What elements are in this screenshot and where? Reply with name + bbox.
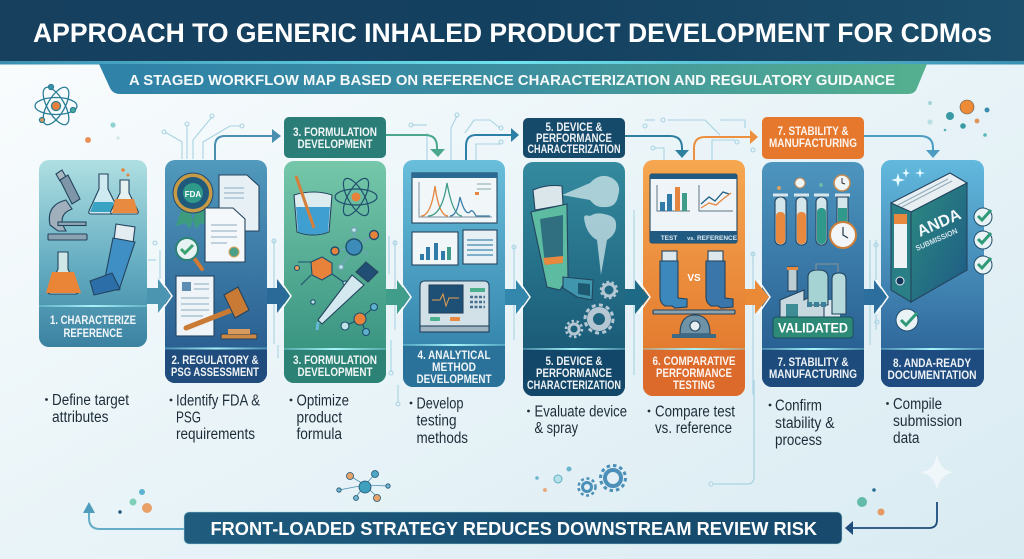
label: 1. CHARACTERIZE <box>50 313 136 327</box>
icon: ANDA binder: ANDA <box>915 206 964 241</box>
arrow: panel 4 to header 5 <box>466 128 519 160</box>
panel: 5 device and performance characterization: PERFORMANCE <box>536 366 612 380</box>
bullet: confirm stability and process: stability & <box>775 415 835 432</box>
icon: analytical instrument <box>420 281 489 332</box>
panel: 5 device and performance characterization <box>523 162 625 396</box>
banner: front-loaded strategy <box>184 512 842 544</box>
icon: bar chart screen <box>412 232 458 265</box>
icon: inhaler cutaway <box>531 186 593 300</box>
panel: 2 regulatory and PSG assessment <box>165 160 267 383</box>
icon: gears <box>566 282 617 337</box>
panel: 6 comparative performance testing <box>643 160 745 396</box>
bullet: optimize product formula: formula <box>296 426 342 443</box>
bullet: optimize product formula: product <box>296 410 343 426</box>
bullet: evaluate device and spray <box>527 404 627 437</box>
label: 8. ANDA-READY <box>893 356 971 370</box>
panel: 3 formulation development: DEVELOPMENT <box>298 365 373 379</box>
header: 3 formulation development <box>284 117 386 158</box>
icon: FDA seal <box>173 173 213 229</box>
icon: lower molecule decoration <box>337 470 390 502</box>
icon: magnifier check <box>176 238 202 269</box>
bullet: evaluate device and spray: Evaluate device <box>534 404 627 420</box>
arrow: header 3 to panel 4 <box>386 135 445 157</box>
panel: 6 comparative performance testing: TESTING <box>673 378 715 392</box>
icon: orange flask <box>111 168 138 214</box>
arrow: 1 to 2 <box>147 279 172 313</box>
bullet: confirm stability and process <box>769 398 835 449</box>
arrow: 7 to 8 <box>864 280 888 314</box>
badge: validated: VALIDATED <box>778 320 848 336</box>
bullet: develop testing methods: methods <box>416 430 468 447</box>
bullet: optimize product formula: Optimize <box>296 392 349 410</box>
bullet: confirm stability and process: process <box>775 432 822 449</box>
icon: data table <box>463 230 497 264</box>
icon: test vs reference screen: TEST <box>661 235 677 242</box>
icon: FDA seal: FDA <box>185 190 201 199</box>
bullet: evaluate device and spray: & spray <box>534 420 578 437</box>
decorative dots near banner <box>118 488 885 516</box>
icon: inhaler <box>90 224 135 295</box>
panel: 7 stability and manufacturing <box>762 162 864 387</box>
bullet: define target attributes <box>45 392 130 426</box>
bullet: develop testing methods: testing <box>416 412 456 430</box>
icon: small clocks <box>777 175 850 191</box>
arrow: 2 to 3 <box>267 279 291 313</box>
icon: ANDA binder <box>891 173 967 302</box>
icon: dropper <box>317 262 378 330</box>
icon: horizontal spray plume <box>562 176 619 207</box>
bullet: identify FDA and PSG requirements: PSG <box>176 410 201 426</box>
icon: gavel <box>186 287 257 339</box>
arrow: into banner from right <box>845 502 937 535</box>
icon: chromatogram screen <box>412 173 497 223</box>
arrow: header 5 to panel 6 <box>625 136 689 158</box>
header: 3 formulation development: 3. FORMULATION <box>293 125 377 139</box>
decorative dots top left <box>85 122 120 143</box>
icon: orange flask lower <box>46 252 81 294</box>
icon: atom top left <box>35 84 77 128</box>
arrow: panel 6 to header 7 <box>694 130 758 160</box>
title: APPROACH TO GENERIC INHALED PRODUCT DEVELOPMENT FOR CDMos <box>33 18 992 48</box>
icon: test tubes <box>773 195 850 245</box>
bullet: confirm stability and process: Confirm <box>775 398 822 414</box>
bullet: identify FDA and PSG requirements: requirements <box>176 426 255 443</box>
icon: test vs reference screen: vs. <box>687 236 695 242</box>
label: 6. COMPARATIVE <box>652 354 736 368</box>
icon: reference inhaler <box>706 251 733 308</box>
bullet: develop testing methods: Develop <box>416 396 464 412</box>
icon: test vs reference screen <box>650 174 738 243</box>
bullet: identify FDA and PSG requirements: Identify FDA & <box>176 392 261 410</box>
icon: ANDA binder: SUBMISSION <box>914 226 959 253</box>
icon: test vs reference screen: REFERENCE <box>697 235 738 242</box>
label: 5. DEVICE & <box>546 354 603 368</box>
header: 7 stability and manufacturing: 7. STABILITY & <box>778 124 849 138</box>
arrow: 4 to 5 <box>505 280 530 314</box>
icon: atom <box>335 175 377 219</box>
bullet: compare test vs. reference <box>648 404 736 437</box>
header: 7 stability and manufacturing: MANUFACTURING <box>769 136 857 150</box>
panel: 6 comparative performance testing: PERFORMANCE <box>656 366 732 380</box>
icon: test inhaler <box>660 251 687 308</box>
icon: vertical spray plume <box>584 213 616 275</box>
title banner <box>0 0 1024 64</box>
bullet: define target attributes: attributes <box>52 409 109 426</box>
icon: beaker <box>294 176 332 235</box>
icon: lower molecule <box>341 304 378 336</box>
bullet: develop testing methods <box>410 396 468 447</box>
vs label: VS <box>687 273 701 284</box>
icon: check marks <box>896 208 992 331</box>
arrow: header 7 to panel 8 <box>864 136 940 158</box>
bullet: compile submission data: data <box>893 430 920 447</box>
panel: 1 characterize reference: REFERENCE <box>64 326 122 340</box>
header: 5 device and performance characterization <box>523 118 625 158</box>
label: 4. ANALYTICAL <box>418 348 490 362</box>
bullet: compare test vs. reference: vs. reference <box>655 420 732 437</box>
icon: blue molecule <box>331 228 378 270</box>
decorative molecules top right <box>927 100 990 137</box>
icon: factory <box>780 264 846 317</box>
panel: 7 stability and manufacturing: MANUFACTURING <box>769 367 857 381</box>
panel: 8 ANDA-ready documentation: DOCUMENTATION <box>888 368 976 382</box>
header: 5 device and performance characterization: CHARACTERIZATION <box>528 142 620 156</box>
decorative circuit traces <box>148 113 879 486</box>
bullet: identify FDA and PSG requirements <box>170 392 261 443</box>
arrow: 3 to 4 <box>386 280 411 314</box>
bullet: compile submission data: submission <box>893 413 962 430</box>
bullet: compile submission data <box>886 396 962 447</box>
label: 2. REGULATORY & <box>172 353 259 367</box>
panel: 2 regulatory and PSG assessment: PSG ASSESSMENT <box>171 365 260 379</box>
badge: validated <box>773 317 853 338</box>
arrow: banner return left <box>83 502 184 529</box>
panel: 4 analytical method development <box>403 160 505 387</box>
icon: documents <box>205 175 259 262</box>
bullet: optimize product formula <box>290 392 349 443</box>
arrow: 6 to 7 <box>745 280 770 314</box>
icon: lower gears decoration <box>535 466 626 496</box>
panel: 1 characterize reference <box>39 160 147 347</box>
arrow: 5 to 6 <box>625 280 650 314</box>
label: 7. STABILITY & <box>778 355 849 369</box>
icon: faint sparkle <box>919 454 955 490</box>
panel: 4 analytical method development: METHOD <box>432 360 476 374</box>
header: 5 device and performance characterization: PERFORMANCE <box>536 131 612 145</box>
bullet: compile submission data: Compile <box>893 396 942 413</box>
bullet: define target attributes: Define target <box>52 392 130 409</box>
panel: 5 device and performance characterization: CHARACTERIZATION <box>527 378 621 392</box>
panel: 3 formulation development <box>284 161 386 383</box>
banner: front-loaded strategy: FRONT-LOADED STRATEGY REDUCES DOWNSTREAM REVIEW RISK <box>210 519 817 539</box>
header: 5 device and performance characterization: 5. DEVICE & <box>546 120 603 134</box>
icon: sparkles <box>891 168 925 187</box>
icon: balance scale <box>653 310 735 338</box>
header: 7 stability and manufacturing <box>762 117 864 159</box>
arrow: panel 2 to header 3 <box>215 129 281 160</box>
icon: blue flask <box>89 174 119 214</box>
icon: prescription document <box>176 276 214 336</box>
subtitle ribbon: A STAGED WORKFLOW MAP BASED ON REFERENCE CHARACTERIZATION AND REGULATORY GUIDANCE <box>129 72 895 89</box>
label: 3. FORMULATION <box>293 353 377 367</box>
header: 3 formulation development: DEVELOPMENT <box>298 137 373 151</box>
icon: hexagon molecule <box>294 257 347 304</box>
icon: microscope <box>48 170 87 240</box>
icon: large clock <box>830 222 856 248</box>
bullet: compare test vs. reference: Compare test <box>655 404 736 420</box>
subtitle ribbon <box>99 64 927 94</box>
panel: 4 analytical method development: DEVELOPMENT <box>416 372 492 386</box>
panel: 8 ANDA-ready documentation <box>881 160 992 387</box>
